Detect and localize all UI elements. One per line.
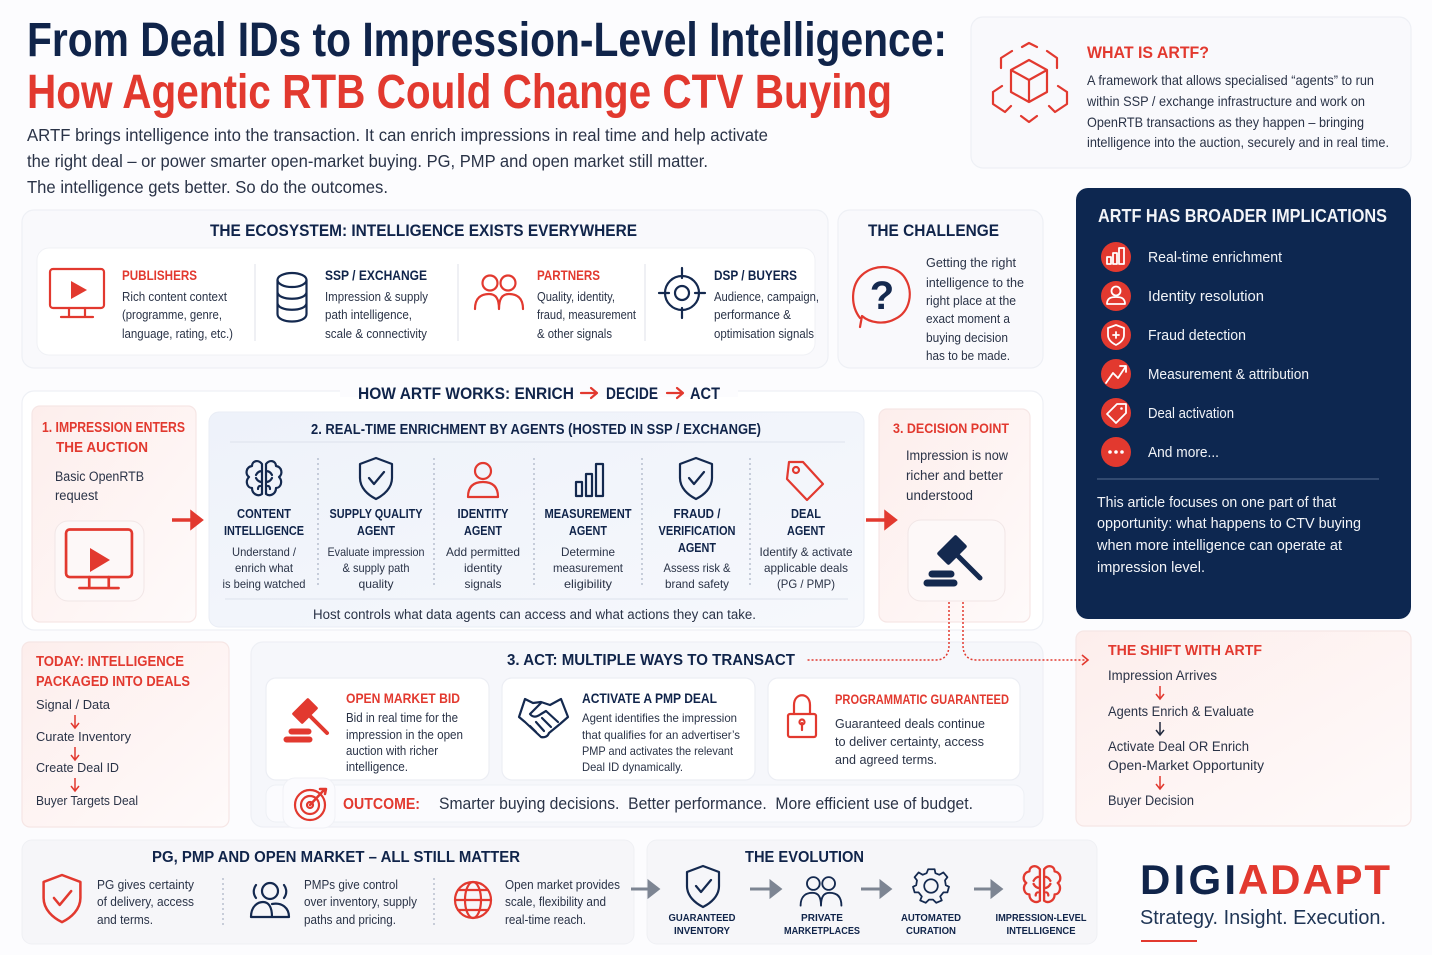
stage: guaranteed inventory: INVENTORY: [674, 925, 730, 937]
stage: private marketplaces: PRIVATE: [801, 912, 843, 924]
item: open market: real-time reach.: [505, 913, 586, 927]
panel: step 2 enrichment: [209, 412, 864, 627]
agent: measurement: Determine: [561, 545, 615, 559]
item: deal activation: [1101, 398, 1234, 428]
item: identity resolution: Identity resolution: [1148, 288, 1264, 305]
agent: supply quality: [328, 458, 424, 591]
agent: content intelligence: is being watched: [222, 577, 306, 591]
intro text: ARTF brings intelligence into the transaction. It can enrich impressions in real time and help activate: [27, 125, 768, 145]
column: publishers: (programme, genre,: [122, 308, 222, 322]
card: open market bid: [266, 678, 489, 780]
panel: the shift with ARTF: Impression Arrives: [1108, 668, 1217, 683]
item: PMP: paths and pricing.: [304, 913, 396, 927]
panel: PG, PMP and open market: [22, 840, 634, 944]
arrows: today flow: [71, 715, 79, 791]
card: open market bid: intelligence.: [346, 760, 408, 774]
title: [27, 14, 947, 119]
title: How Agentic RTB Could Change CTV Buying: [27, 66, 892, 119]
heading: how ARTF works: ACT: [690, 384, 721, 403]
panel: step 3 decision point: understood: [906, 488, 973, 503]
icon: question bubble: [853, 267, 910, 327]
column: partners: Quality, identity,: [537, 290, 615, 304]
panel: what is ARTF: [971, 17, 1411, 168]
agent: identity: signals: [464, 577, 502, 591]
stage: automated curation: [901, 869, 961, 937]
panel: step 1 impression: [32, 406, 196, 622]
agent: fraud / verification: VERIFICATION: [658, 524, 736, 538]
agent: identity: identity: [464, 561, 502, 575]
column: SSP / exchange: Impression & supply: [325, 290, 429, 304]
panel: step 1 impression: Basic OpenRTB: [55, 469, 144, 484]
text: challenge body: Getting the right: [926, 255, 1016, 270]
stage: impression-level intelligence: INTELLIGENCE: [1006, 925, 1076, 937]
stage: guaranteed inventory: GUARANTEED: [668, 912, 736, 924]
item: and more: And more...: [1148, 444, 1219, 461]
text: ARTF definition: within SSP / exchange infrastructure and work on: [1086, 93, 1365, 109]
heading: how ARTF works: HOW ARTF WORKS: ENRICH: [358, 384, 574, 403]
heading: the evolution: THE EVOLUTION: [745, 849, 864, 866]
card: open market bid: impression in the open: [346, 728, 463, 742]
card: activate a PMP deal: that qualifies for an advertiser’s: [582, 728, 740, 742]
item: PMP: PMPs give control: [304, 878, 398, 892]
stage: impression-level intelligence: IMPRESSION-LEVEL: [996, 912, 1087, 924]
logo: Digiadapt: [1140, 856, 1390, 941]
card: activate a PMP deal: ACTIVATE A PMP DEAL: [582, 690, 717, 706]
panel: the shift with ARTF: [1076, 631, 1411, 826]
heading: what is ARTF: WHAT IS ARTF?: [1087, 43, 1209, 62]
agent: identity: IDENTITY: [458, 507, 509, 521]
panel: today: PACKAGED INTO DEALS: [36, 674, 190, 690]
agent: deal: (PG / PMP): [777, 577, 835, 591]
panel: today: Curate Inventory: [36, 729, 131, 744]
stage: private marketplaces: MARKETPLACES: [784, 925, 860, 937]
intro text: The intelligence gets better. So do the outcomes.: [27, 177, 388, 197]
card: activate a PMP deal: Deal ID dynamically.: [582, 760, 683, 774]
item: open market: scale, flexibility and: [505, 895, 606, 909]
text: article focus: opportunity: what happens to CTV buying: [1097, 515, 1361, 532]
agent: fraud / verification: [658, 458, 736, 591]
text: challenge body: right place at the: [926, 293, 1016, 308]
agent: identity: Add permitted: [446, 545, 520, 559]
title: From Deal IDs to Impression-Level Intelligence:: [27, 14, 947, 67]
arrow: enrichment to decision: [866, 513, 895, 527]
agent: fraud / verification: Assess risk &: [664, 561, 730, 575]
card: open market bid: auction with richer: [346, 744, 438, 758]
panel: act: [251, 642, 1043, 828]
panel: step 3 decision point: Impression is now: [906, 448, 1008, 463]
heading: all still matter: PG, PMP AND OPEN MARKET – ALL STILL MATTER: [152, 849, 520, 866]
item: fraud detection: Fraud detection: [1148, 327, 1246, 344]
item: open market: [455, 878, 620, 927]
logo: Digiadapt: Strategy. Insight. Execution.: [1140, 907, 1386, 929]
column: SSP / exchange: [278, 267, 429, 341]
column: DSP / buyers: optimisation signals: [714, 327, 814, 341]
agent: fraud / verification: brand safety: [665, 577, 729, 591]
card: open market bid: Bid in real time for the: [346, 711, 458, 725]
text: article focus: [1096, 494, 1361, 576]
heading: how ARTF works: [358, 384, 721, 403]
panel: today: [22, 642, 229, 827]
column: DSP / buyers: DSP / BUYERS: [714, 267, 797, 283]
icon: gavel navy: [924, 535, 980, 586]
agent: deal: Identify & activate: [760, 545, 853, 559]
agent: measurement: AGENT: [569, 524, 607, 538]
panel: step 1 impression: 1. IMPRESSION ENTERS: [42, 420, 185, 436]
item: and more: [1101, 437, 1219, 467]
card: programmatic guaranteed: to deliver certainty, access: [835, 734, 984, 749]
item: fraud detection: [1101, 320, 1246, 350]
panel: how ARTF works: [22, 384, 1043, 630]
column: partners: PARTNERS: [537, 267, 600, 283]
stage: guaranteed inventory: [668, 866, 736, 937]
panel: step 3 decision point: richer and better: [906, 468, 1003, 483]
text: article focus: This article focuses on one part of that: [1097, 494, 1337, 511]
column: partners: [475, 267, 636, 341]
item: real-time enrichment: Real-time enrichment: [1148, 249, 1283, 266]
panel: today: Create Deal ID: [36, 760, 119, 775]
column: publishers: PUBLISHERS: [122, 267, 197, 283]
panel: step 1 impression: request: [55, 488, 98, 503]
panel: the shift with ARTF: Agents Enrich & Evaluate: [1108, 704, 1254, 719]
panel: ecosystem: [22, 210, 828, 368]
item: PG: of delivery, access: [97, 895, 194, 909]
heading: ecosystem: THE ECOSYSTEM: INTELLIGENCE EXISTS EVERYWHERE: [210, 222, 637, 240]
text: challenge body: has to be made.: [926, 348, 1010, 363]
agent: content intelligence: INTELLIGENCE: [224, 524, 304, 538]
item: deal activation: Deal activation: [1148, 405, 1234, 422]
agent: measurement: [544, 464, 632, 591]
column: partners: & other signals: [537, 327, 612, 341]
agent: supply quality: Evaluate impression: [328, 545, 424, 559]
item: PG: PG gives certainty: [97, 878, 195, 892]
panel: step 1 impression: THE AUCTION: [56, 440, 148, 456]
panel: the challenge: [838, 210, 1043, 368]
agent: supply quality: AGENT: [357, 524, 395, 538]
connector: dashed decision lines: [807, 602, 1088, 665]
item: identity resolution: [1101, 281, 1264, 311]
column: publishers: language, rating, etc.): [122, 327, 233, 341]
agent: deal: DEAL: [791, 507, 821, 521]
column: SSP / exchange: path intelligence,: [325, 308, 412, 322]
text: ARTF definition: OpenRTB transactions as they happen – bringing: [1087, 114, 1364, 130]
heading: broader implications: ARTF HAS BROADER IMPLICATIONS: [1098, 206, 1387, 226]
card: programmatic guaranteed: Guaranteed deals continue: [835, 716, 985, 731]
item: measurement and attribution: Measurement & attribution: [1148, 366, 1309, 383]
text: article focus: when more intelligence can operate at: [1096, 537, 1343, 554]
logo: Digiadapt: ADAPT: [1238, 856, 1390, 903]
agent: fraud / verification: FRAUD /: [674, 507, 721, 521]
item: open market: Open market provides: [505, 878, 620, 892]
panel: the shift with ARTF: THE SHIFT WITH ARTF: [1108, 642, 1262, 659]
column: DSP / buyers: Audience, campaign,: [714, 290, 819, 304]
card: activate a PMP deal: PMP and activates the relevant: [582, 744, 734, 758]
agent: measurement: eligibility: [564, 577, 612, 591]
panel: broader implications: [1076, 188, 1411, 619]
intro text: [27, 125, 768, 197]
panel: step 3 decision point: 3. DECISION POINT: [893, 420, 1009, 436]
panel: the shift with ARTF: Buyer Decision: [1108, 793, 1194, 808]
panel: step 3 decision point: [879, 409, 1030, 622]
agent: content intelligence: enrich what: [235, 561, 294, 575]
column: DSP / buyers: [659, 267, 819, 341]
agent: fraud / verification: AGENT: [678, 541, 716, 555]
card: programmatic guaranteed: and agreed terms.: [835, 752, 937, 767]
column: SSP / exchange: scale & connectivity: [325, 327, 428, 341]
panel: today: Signal / Data: [36, 697, 111, 712]
arrows: evolution progression: [631, 882, 1001, 896]
card: open market bid: OPEN MARKET BID: [346, 690, 460, 706]
text: ARTF definition: [1086, 72, 1389, 150]
panel: today: Buyer Targets Deal: [36, 793, 138, 808]
heading: the challenge: THE CHALLENGE: [868, 222, 999, 240]
column: publishers: [50, 267, 233, 341]
agent: measurement: MEASUREMENT: [544, 507, 632, 521]
outcome bar: OUTCOME:: [343, 796, 420, 813]
icon: question bubble: ?: [870, 274, 894, 318]
intro text: the right deal – or power smarter open-market buying. PG, PMP and open market still matter.: [27, 151, 708, 171]
arrows: shift flow: [1156, 686, 1164, 789]
stage: impression-level intelligence: [996, 866, 1087, 937]
text: ARTF definition: intelligence into the auction, securely and in real time.: [1087, 134, 1389, 150]
panel: the shift with ARTF: Open-Market Opportunity: [1108, 758, 1264, 773]
item: real-time enrichment: [1101, 242, 1283, 272]
stage: automated curation: AUTOMATED: [901, 912, 961, 924]
card: activate a PMP deal: Agent identifies the impression: [582, 711, 737, 725]
card: activate a PMP deal: [502, 678, 755, 780]
heading: how ARTF works: DECIDE: [606, 384, 658, 403]
item: PMP: over inventory, supply: [304, 895, 418, 909]
panel: today: TODAY: INTELLIGENCE: [36, 654, 184, 670]
agent: deal: applicable deals: [764, 561, 848, 575]
item: measurement and attribution: [1101, 359, 1309, 389]
logo: Digiadapt: DIGI: [1140, 856, 1236, 903]
panel: the evolution: [647, 840, 1097, 944]
agent: supply quality: SUPPLY QUALITY: [330, 507, 423, 521]
agent: identity: [446, 463, 520, 591]
column: partners: fraud, measurement: [537, 308, 636, 322]
card: programmatic guaranteed: [768, 678, 1020, 780]
agent: content intelligence: CONTENT: [237, 507, 291, 521]
item: PG: [44, 875, 195, 927]
agent: content intelligence: Understand /: [232, 545, 297, 559]
text: challenge body: exact moment a: [926, 311, 1011, 326]
agent: deal: AGENT: [787, 524, 825, 538]
outcome bar: Smarter buying decisions. Better performance. More efficient use of budget.: [439, 795, 973, 813]
icon: monitor: [66, 530, 132, 588]
text: challenge body: intelligence to the: [926, 275, 1024, 290]
item: PMP: [251, 878, 418, 927]
text: challenge body: [926, 255, 1024, 363]
agent: supply quality: quality: [358, 577, 394, 591]
panel: step 2 enrichment: 2. REAL-TIME ENRICHMENT BY AGENTS (HOSTED IN SSP / EXCHANGE): [311, 422, 761, 438]
agent: content intelligence: [222, 461, 306, 591]
agent: supply quality: & supply path: [342, 561, 410, 575]
column: DSP / buyers: performance &: [714, 308, 792, 322]
column: publishers: Rich content context: [122, 290, 227, 304]
stage: private marketplaces: [784, 877, 860, 937]
stage: automated curation: CURATION: [906, 925, 956, 937]
text: ARTF definition: A framework that allows specialised “agents” to run: [1087, 72, 1374, 88]
card: programmatic guaranteed: PROGRAMMATIC GUARANTEED: [835, 692, 1009, 707]
text: host controls: Host controls what data agents can access and what actions they can take.: [313, 607, 756, 622]
outcome bar: [266, 778, 1024, 828]
agent: deal: [760, 462, 853, 591]
arrow: impression to enrichment: [172, 513, 201, 527]
column: SSP / exchange: SSP / EXCHANGE: [325, 267, 427, 283]
text: challenge body: buying decision: [926, 330, 1008, 345]
agent: measurement: measurement: [553, 561, 624, 575]
agent: identity: AGENT: [464, 524, 502, 538]
panel: the shift with ARTF: Activate Deal OR Enrich: [1108, 739, 1249, 754]
item: PG: and terms.: [97, 913, 153, 927]
icon: target: [295, 789, 326, 820]
text: article focus: impression level.: [1097, 559, 1205, 576]
icon: cube: [993, 43, 1067, 122]
heading: act: 3. ACT: MULTIPLE WAYS TO TRANSACT: [507, 652, 795, 669]
